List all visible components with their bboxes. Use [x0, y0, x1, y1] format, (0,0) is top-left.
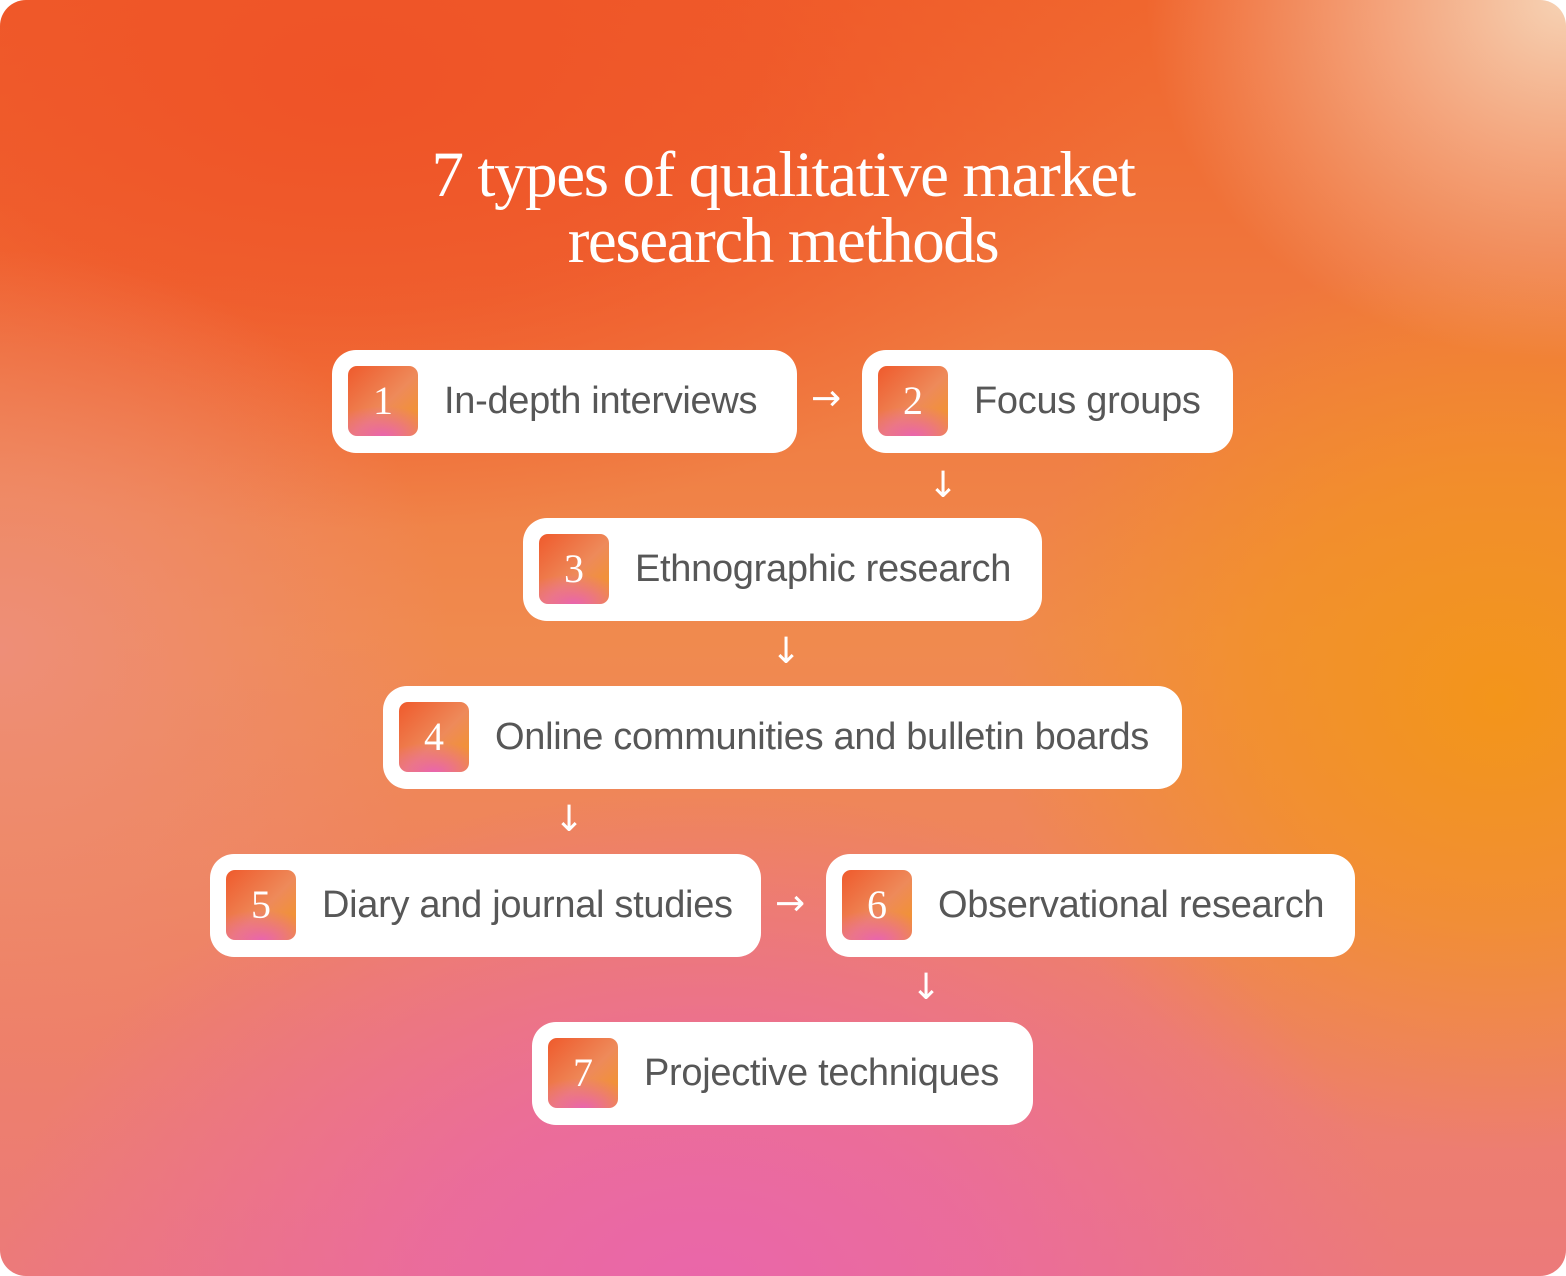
step 2: 2	[903, 378, 923, 423]
step 6: Observational research	[938, 884, 1324, 926]
arrow 1 to 2: →	[811, 378, 841, 419]
step 3: Ethnographic research	[635, 548, 1011, 590]
title: 7 types of qualitative market	[431, 139, 1135, 211]
step 7	[532, 1022, 1033, 1125]
arrow 5 to 6: →	[775, 883, 805, 924]
step 4: Online communities and bulletin boards	[495, 716, 1149, 758]
arrow 4 to 5: ↓	[554, 799, 584, 840]
step 6	[826, 854, 1355, 957]
step 3	[523, 518, 1042, 621]
step 1: 1	[373, 378, 393, 423]
step 5: 5	[251, 882, 271, 927]
step 1: In-depth interviews	[444, 380, 757, 422]
step 5: Diary and journal studies	[322, 884, 733, 926]
step 6: 6	[867, 882, 887, 927]
title	[431, 139, 1136, 277]
step 7: 7	[573, 1050, 593, 1095]
step 3: 3	[564, 546, 584, 591]
arrow 2 to 3: ↓	[928, 465, 958, 506]
step 7: Projective techniques	[644, 1052, 999, 1094]
arrow 3 to 4: ↓	[771, 631, 801, 672]
step 4	[383, 686, 1182, 789]
step 1	[332, 350, 797, 453]
step 2	[862, 350, 1233, 453]
step 2: Focus groups	[974, 380, 1201, 422]
title: research methods	[568, 205, 998, 277]
step 5	[210, 854, 761, 957]
step 4: 4	[424, 714, 444, 759]
arrow 6 to 7: ↓	[911, 967, 941, 1008]
